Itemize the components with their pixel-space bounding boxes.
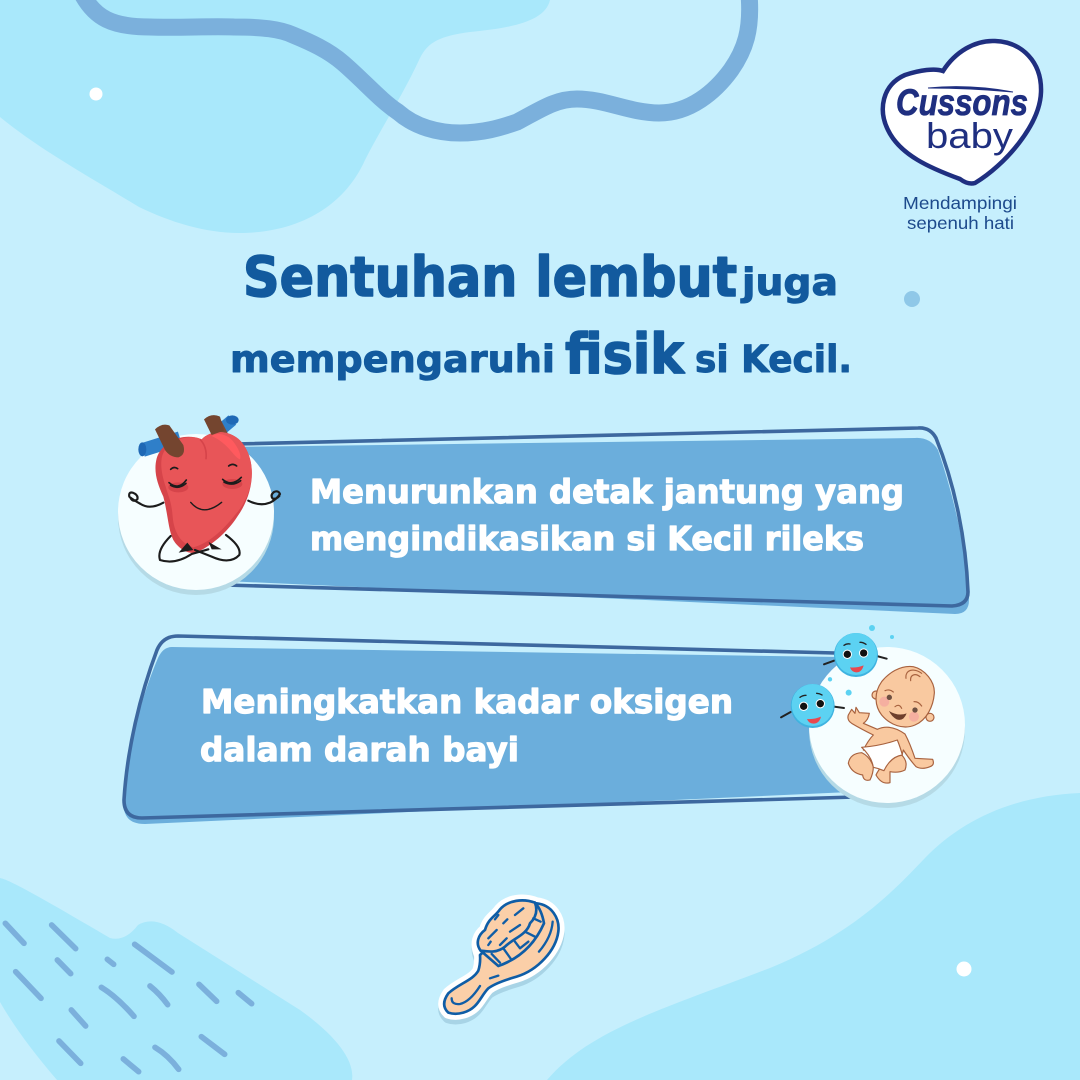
panel text: Meningkatkan kadar oksigen — [201, 682, 733, 721]
panel text — [200, 682, 733, 769]
baby — [848, 666, 934, 783]
bubble characters — [781, 625, 894, 728]
background blob: bottom left with dashes — [0, 878, 352, 1080]
logo wordmark Cussons: Cussons — [896, 82, 1028, 123]
icon: hair brush — [444, 900, 559, 1018]
title: Sentuhan lembut — [243, 245, 737, 309]
panel outline — [124, 636, 855, 818]
icon circle — [118, 439, 274, 595]
logo swoosh — [928, 87, 1013, 92]
brush white outline — [444, 901, 559, 1014]
brush shadow — [444, 905, 559, 1018]
decorative dot: white top left — [90, 88, 102, 100]
panel: oxygen benefit — [124, 636, 855, 824]
panel fill — [124, 647, 850, 824]
brush details — [452, 908, 553, 1004]
panel fill — [225, 438, 969, 614]
panel outline — [225, 428, 968, 606]
logo tagline: sepenuh hati — [907, 213, 1014, 233]
panel text: dalam darah bayi — [200, 730, 519, 769]
title: fisik — [565, 322, 685, 386]
icon: baby with oxygen bubbles — [781, 625, 965, 808]
logo tagline: Mendampingi — [903, 193, 1017, 213]
panel text — [310, 472, 904, 558]
logo wordmark baby: baby — [926, 115, 1013, 156]
arms and legs — [129, 491, 280, 562]
background blob: bottom right — [547, 793, 1080, 1080]
panel: heart rate benefit — [225, 428, 969, 614]
panel text: mengindikasikan si Kecil rileks — [310, 519, 864, 558]
panel text: Menurunkan detak jantung yang — [310, 472, 904, 511]
logo heart — [883, 41, 1041, 184]
brush bristle top — [478, 900, 536, 952]
brush bristle base — [481, 903, 544, 966]
heart body — [155, 432, 252, 553]
background blob: top left — [0, 0, 550, 233]
decorative dot: white bottom right — [956, 962, 972, 976]
icon circle — [809, 652, 965, 808]
vessels — [143, 438, 180, 450]
decorative dot: blue — [904, 291, 920, 307]
logo: Cussons baby — [883, 41, 1041, 233]
decorative squiggle line — [82, 0, 750, 133]
icon: meditating heart — [118, 415, 280, 595]
title: si Kecil. — [695, 338, 852, 381]
face — [169, 464, 241, 487]
title: juga — [740, 261, 838, 304]
title — [230, 245, 852, 386]
brush body — [444, 903, 559, 1014]
title: mempengaruhi — [230, 338, 555, 381]
